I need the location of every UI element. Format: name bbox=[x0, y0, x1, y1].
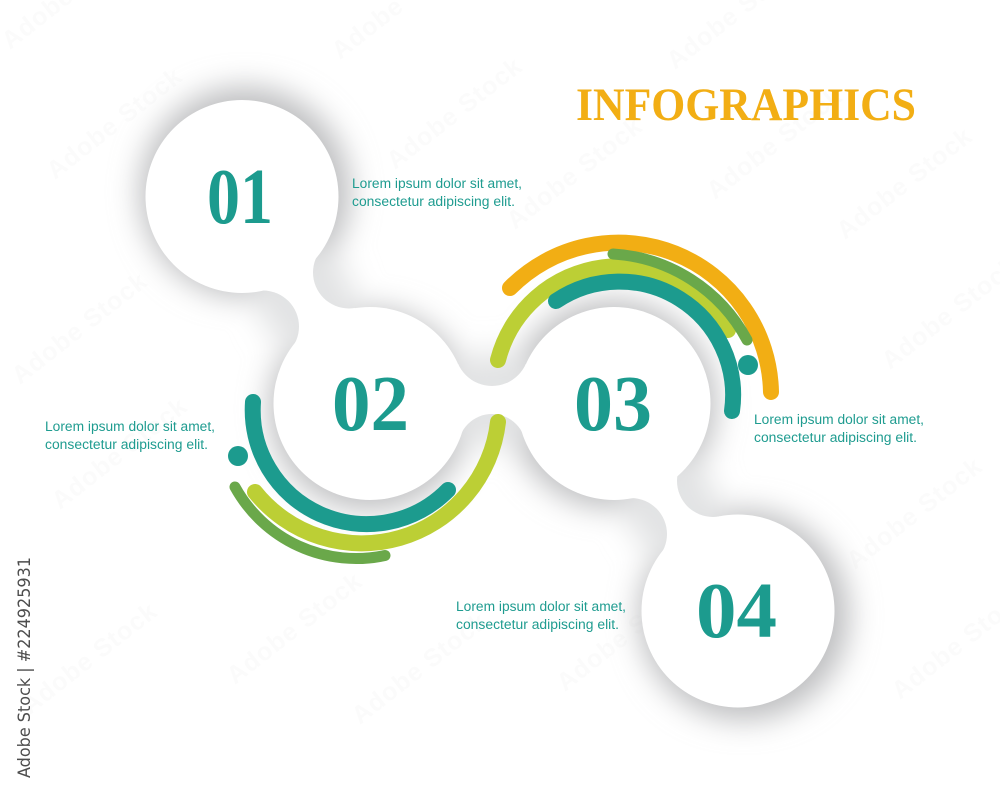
circle 04 bbox=[642, 514, 834, 708]
watermark pattern: Adobe Stock bbox=[831, 122, 978, 245]
number 01: 01 bbox=[207, 154, 273, 241]
watermark pattern: Adobe Stock bbox=[41, 62, 188, 185]
watermark pattern: Adobe Stock bbox=[46, 392, 193, 515]
text block 04 bbox=[456, 599, 626, 632]
watermark pattern: Adobe Stock bbox=[221, 567, 368, 690]
watermark pattern: Adobe Stock bbox=[841, 452, 988, 575]
number 04: 04 bbox=[696, 568, 777, 655]
circle 03 bbox=[518, 307, 710, 500]
text block 03: consectetur adipiscing elit. bbox=[754, 430, 917, 445]
number 03: 03 bbox=[574, 361, 652, 448]
text block 04: consectetur adipiscing elit. bbox=[456, 617, 619, 632]
text block 03 bbox=[754, 412, 924, 445]
watermark pattern: Adobe Stock bbox=[16, 597, 163, 720]
connecting necks bbox=[264, 258, 718, 550]
text block 04: Lorem ipsum dolor sit amet, bbox=[456, 599, 626, 614]
text block 01 bbox=[352, 176, 522, 209]
arc: teal bbox=[556, 282, 733, 411]
text block 02: consectetur adipiscing elit. bbox=[45, 437, 208, 452]
title: INFOGRAPHICS bbox=[576, 79, 916, 131]
soft drop shadows behind the circles bbox=[140, 87, 849, 720]
circle 02 bbox=[274, 307, 466, 500]
stock credit: Adobe Stock | #224925931 bbox=[15, 557, 35, 778]
watermark pattern: Adobe Stock bbox=[551, 574, 698, 697]
arc: orange bbox=[510, 243, 771, 392]
text block 02: Lorem ipsum dolor sit amet, bbox=[45, 419, 215, 434]
watermark pattern: Adobe Stock bbox=[501, 112, 648, 235]
arc: light green bbox=[498, 266, 728, 360]
connected white circle shape bbox=[146, 100, 834, 708]
watermark pattern: Adobe Stock bbox=[346, 607, 493, 730]
icon: teal dot at step 02 bbox=[228, 446, 248, 466]
text block 02 bbox=[45, 419, 215, 452]
watermark pattern: Adobe Stock bbox=[6, 267, 153, 390]
arc: teal lower bbox=[253, 402, 448, 524]
lower arcs around step 02 bbox=[235, 402, 498, 559]
arc: light green lower bbox=[255, 422, 498, 543]
arc: dark green bbox=[613, 254, 747, 340]
number 02: 02 bbox=[332, 361, 409, 448]
watermark pattern: Adobe Stock bbox=[701, 82, 848, 205]
icon: teal dot at step 03 bbox=[738, 355, 758, 375]
text block 03: Lorem ipsum dolor sit amet, bbox=[754, 412, 924, 427]
watermark pattern: Adobe Stock bbox=[166, 107, 313, 230]
upper arcs around step 03 bbox=[498, 243, 771, 411]
text block 01: Lorem ipsum dolor sit amet, bbox=[352, 176, 522, 191]
watermark pattern: Adobe Stock bbox=[381, 52, 528, 175]
text block 01: consectetur adipiscing elit. bbox=[352, 194, 515, 209]
arc: dark green lower bbox=[235, 487, 385, 559]
circle 01 bbox=[146, 100, 338, 293]
